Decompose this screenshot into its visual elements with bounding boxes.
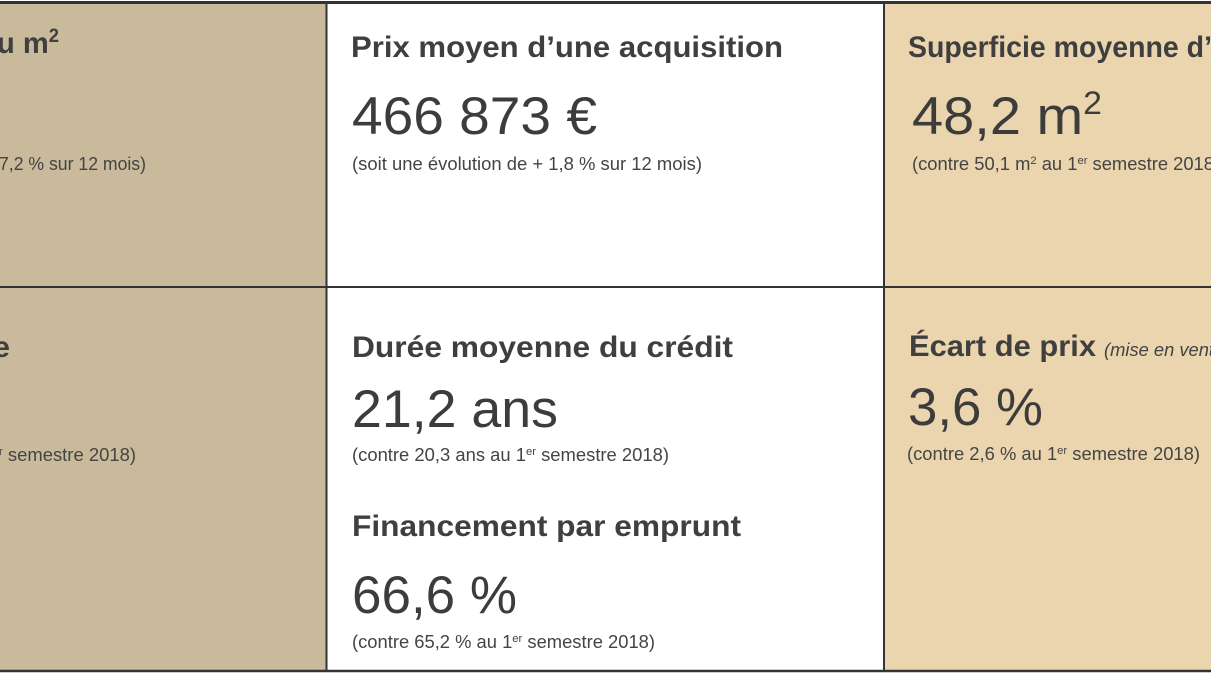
panel: average acquisition price xyxy=(351,31,783,174)
note: surface comparison: semestre 2018 xyxy=(1087,154,1211,174)
note: price evolution: (soit une évolution de + 1,8 % sur 12 mois) xyxy=(352,154,702,174)
note: financing comparison: (contre 65,2 % au 1 xyxy=(352,632,509,652)
panel: average surface xyxy=(908,31,1211,174)
panel: right column background xyxy=(885,3,1211,671)
note: credit duration comparison: er xyxy=(526,446,536,458)
heading: average credit duration: Durée moyenne du crédit xyxy=(352,331,733,364)
heading: price per m2: 2 xyxy=(49,26,59,47)
panel: price per square metre (cropped) xyxy=(0,26,146,174)
note: credit duration comparison: (contre 20,3 ans au 1 xyxy=(352,445,522,465)
value: 48.2 square metres: 48,2 m xyxy=(912,87,1074,146)
note: surface comparison: 2 xyxy=(1030,155,1037,167)
note: price gap comparison: semestre 2018) xyxy=(1067,444,1200,464)
value: 66.6 percent: 66,6 % xyxy=(352,566,517,625)
note: price gap comparison: er xyxy=(1057,445,1068,457)
value: 48.2 square metres: 2 xyxy=(1083,85,1102,121)
value: 21.2 years: 21,2 ans xyxy=(352,380,558,439)
heading qualifier: (mise en vent xyxy=(1104,340,1211,360)
note: surface comparison: au 1 xyxy=(1037,154,1077,174)
panel: credit duration and loan financing xyxy=(352,331,741,652)
note: surface comparison: (contre 50,1 m xyxy=(912,154,1028,174)
note: price gap comparison: (contre 2,6 % au 1 xyxy=(907,444,1054,464)
note: semester comparison: semestre 2018) xyxy=(3,445,136,465)
heading: average acquisition price: Prix moyen d’une acquisition xyxy=(351,31,783,64)
value: 3.6 percent: 3,6 % xyxy=(908,378,1043,437)
heading: price gap: Écart de prix xyxy=(909,329,1096,363)
note: credit duration comparison: semestre 2018) xyxy=(536,445,669,465)
note: financing comparison: er xyxy=(512,633,523,645)
panel: left column background xyxy=(0,3,326,671)
panel: price gap xyxy=(907,329,1211,464)
panel: lower left (cropped) xyxy=(0,331,136,465)
note: financing comparison: semestre 2018) xyxy=(522,632,655,652)
value: 466 873 euros: 466 873 € xyxy=(352,87,597,146)
note: 12 month change: 7,2 % sur 12 mois) xyxy=(0,154,146,174)
heading: loan financing: Financement par emprunt xyxy=(352,510,741,543)
note: surface comparison: er xyxy=(1077,155,1088,167)
